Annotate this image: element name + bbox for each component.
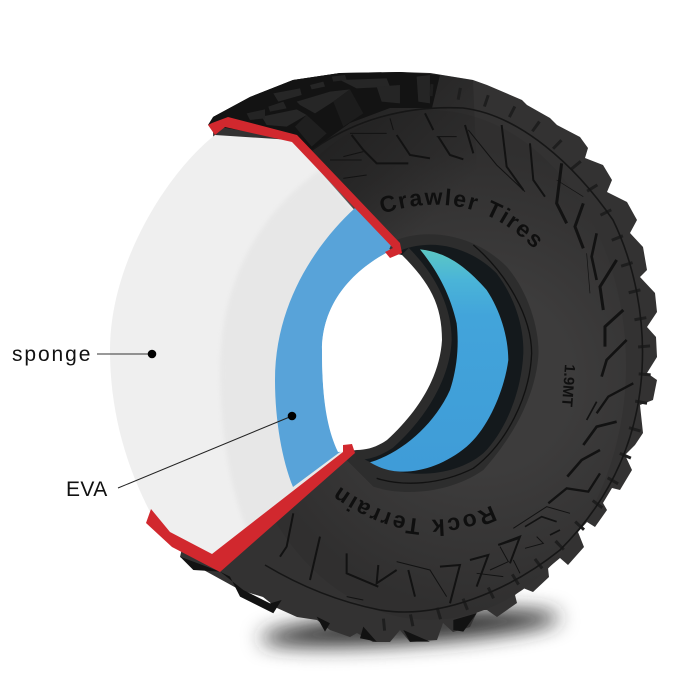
rim lip: [357, 255, 442, 450]
lower-right tread grooves: [490, 402, 617, 573]
sidewall text: 1.9MT: 1.9MT: [558, 364, 578, 407]
tread lug notches: [380, 90, 645, 625]
tire: Rock Terrain: [335, 487, 497, 536]
red cut outline: top: [208, 117, 402, 258]
tire: [180, 72, 657, 642]
sponge insert: [110, 135, 390, 560]
dark shoulder tread, top: [208, 72, 440, 150]
outer sponge: [110, 135, 390, 560]
tire: Crawler Tires: [380, 188, 540, 248]
circumferential tread line: [265, 108, 643, 612]
red cut outline: bottom: [146, 444, 355, 572]
EVA foam ring: [275, 208, 392, 487]
shoulder tread blocks: [247, 75, 430, 147]
groove line: [377, 245, 532, 483]
inner sponge step: [220, 170, 385, 530]
upper tread grooves: [330, 113, 633, 413]
bevel: [347, 234, 538, 492]
label: EVA: EVA: [66, 478, 108, 501]
ground shadow: [259, 603, 561, 653]
lower tread, dark gaps: [180, 557, 477, 642]
dark rim: [360, 245, 523, 474]
lower tread grooves: [280, 513, 520, 603]
sidewall text: Rock Terrain: [310, 460, 492, 520]
tire silhouette: [180, 72, 657, 642]
inner blue EVA seen through hole: [370, 249, 508, 472]
label: sponge: [12, 343, 156, 366]
sidewall text: Crawler Tires: [382, 205, 560, 275]
label: EVA: [66, 412, 296, 501]
sidewall: [234, 110, 626, 620]
label: sponge: sponge: [12, 343, 92, 366]
wheel hole bevel and inner rim: [347, 234, 538, 492]
dark upper-left shading: [213, 73, 480, 245]
hole opening: [322, 252, 442, 452]
